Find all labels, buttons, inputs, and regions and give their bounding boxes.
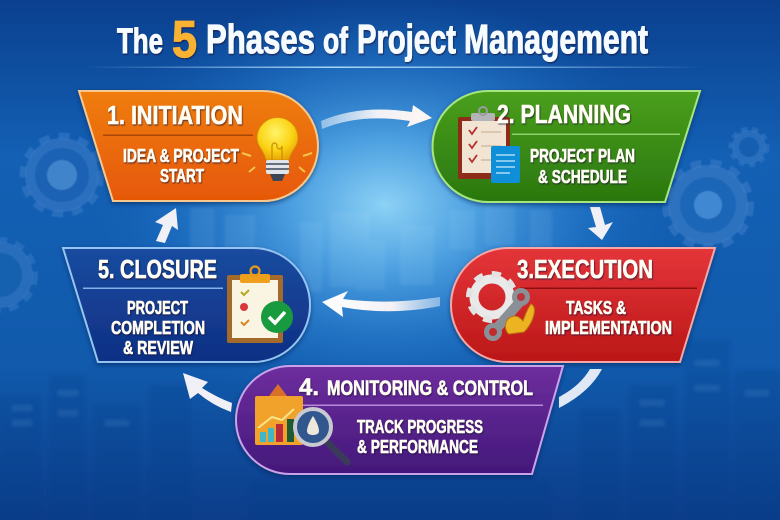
- arrow: monitoring to closure: [183, 373, 232, 412]
- text: monitoring description: [357, 416, 483, 457]
- heading: planning: 2. PLANNING: [497, 99, 631, 129]
- icon: clipboard with document: [458, 107, 520, 183]
- title: Management: [464, 16, 648, 62]
- heading: monitoring and control: [299, 374, 533, 401]
- title: Project: [357, 16, 456, 62]
- text: execution description: [545, 298, 672, 338]
- arrow: initiation to planning: [321, 105, 432, 129]
- panel: 4 monitoring and control: [236, 366, 563, 474]
- icon: checklist clipboard: [227, 266, 293, 343]
- text: closure description: & REVIEW: [123, 338, 193, 358]
- heading: monitoring and control: 4.: [299, 374, 319, 401]
- heading: monitoring and control: MONITORING & CONTROL: [327, 377, 533, 400]
- text: closure description: [111, 298, 205, 358]
- heading: initiation: 1. INITIATION: [107, 100, 243, 130]
- text: closure description: PROJECT: [127, 298, 188, 318]
- icon: chart and magnifier: [255, 384, 347, 462]
- arrow: planning to execution: [588, 207, 613, 240]
- text: initiation description: START: [160, 166, 204, 186]
- arrow: monitoring band toward execution: [559, 369, 602, 408]
- text: initiation description: IDEA & PROJECT: [123, 146, 239, 166]
- panel: 3 execution: [451, 248, 715, 362]
- heading: execution: 3.EXECUTION: [517, 254, 653, 284]
- gear: left large: [23, 136, 101, 214]
- title: of: [323, 20, 349, 61]
- title: 5: [172, 11, 197, 69]
- text: closure description: COMPLETION: [111, 318, 205, 338]
- title: The: [117, 22, 163, 61]
- gear: left lower: [0, 240, 35, 310]
- heading: closure: 5. CLOSURE: [98, 254, 217, 284]
- panel: 2 planning: [433, 91, 700, 202]
- text: planning description: & SCHEDULE: [538, 167, 627, 187]
- text: monitoring description: & PERFORMANCE: [357, 436, 478, 457]
- icon: light bulb: [242, 117, 312, 181]
- arrow: execution to closure: [322, 291, 440, 317]
- text: planning description: [530, 146, 635, 187]
- gear: right large: [666, 163, 750, 247]
- city skyline backdrop: [0, 205, 780, 520]
- text: monitoring description: TRACK PROGRESS: [357, 416, 483, 437]
- panel: 1 initiation: [79, 91, 318, 201]
- arrow: closure to initiation: [155, 208, 178, 243]
- panel: 5 closure: [63, 248, 310, 362]
- text: initiation description: [123, 146, 239, 186]
- text: execution description: TASKS &: [566, 298, 626, 318]
- text: planning description: PROJECT PLAN: [530, 146, 635, 166]
- text: execution description: IMPLEMENTATION: [545, 318, 672, 338]
- title: Phases: [206, 16, 315, 62]
- title: [117, 11, 648, 69]
- gear: right small: [731, 129, 767, 165]
- icon: gear and wrench: [469, 274, 534, 341]
